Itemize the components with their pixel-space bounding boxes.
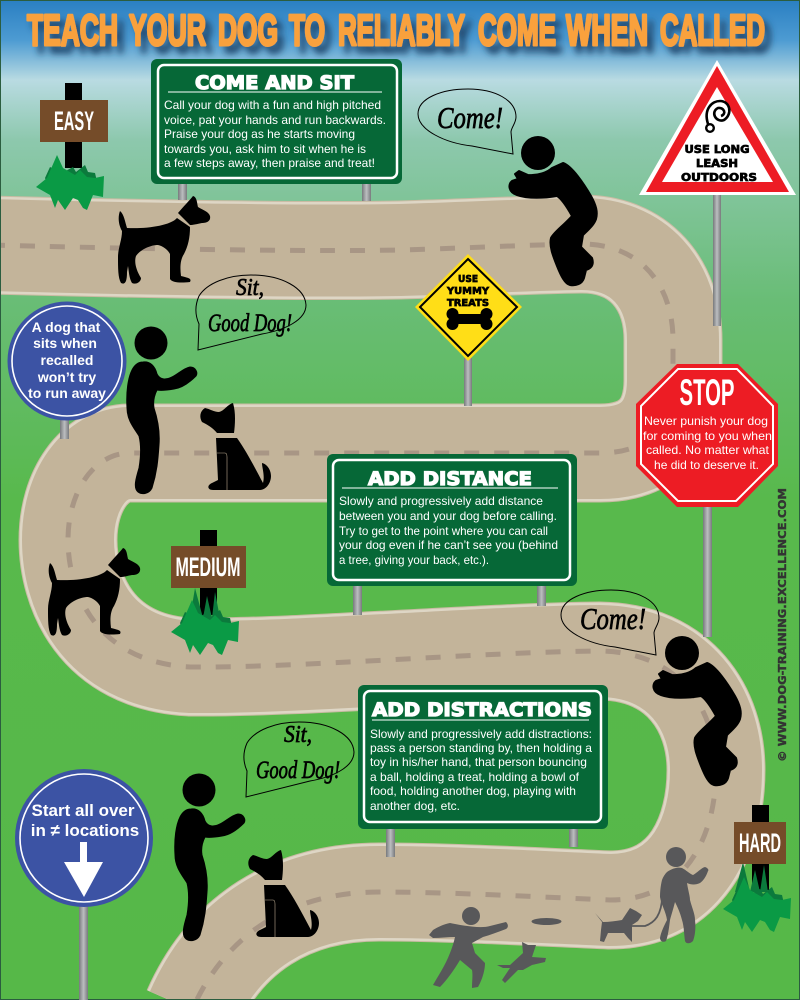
title: COME bbox=[478, 6, 556, 55]
person: standing lower bbox=[175, 774, 245, 941]
sign: stop: he did to deserve it. bbox=[654, 458, 759, 472]
panel: add distance: a tree, giving your back, etc.). bbox=[339, 553, 489, 567]
speech bubble: come lower bbox=[561, 590, 659, 655]
panel: add distractions: a ball, holding a treat, holding a bowl of bbox=[370, 770, 580, 784]
sign: easy: EASY bbox=[54, 106, 94, 136]
sign: use yummy treats: YUMMY bbox=[446, 286, 489, 297]
panel: come and sit: Call your dog with a fun and high pitched bbox=[164, 98, 381, 112]
panel: add distance: your dog even if he can’t see you (behind bbox=[339, 538, 558, 552]
sign: use yummy treats: TREATS bbox=[447, 298, 489, 309]
panel: add distance: Slowly and progressively add distance bbox=[339, 494, 543, 508]
sign: a dog that sits: recalled bbox=[41, 352, 93, 368]
panel: add distractions: ADD DISTRACTIONS bbox=[372, 699, 592, 721]
panel: come and sit: COME AND SIT bbox=[195, 72, 354, 94]
sign: use long leash outdoors: LEASH bbox=[696, 158, 738, 170]
title: TO bbox=[289, 6, 325, 55]
panel: come and sit: voice, pat your hands and run backwards. bbox=[164, 113, 386, 127]
panel: add distractions: pass a person standing by, then holding a bbox=[370, 741, 592, 755]
sign: a dog that sits: sits when bbox=[33, 335, 97, 351]
dog: jumping for frisbee bbox=[497, 942, 546, 983]
speech bubble: sit good dog lower bbox=[244, 722, 354, 797]
winding road bbox=[0, 244, 716, 1000]
sign: hard bbox=[723, 805, 791, 932]
title bbox=[27, 6, 765, 55]
sign: a dog that sits bbox=[8, 302, 126, 439]
title: DOG bbox=[218, 6, 278, 55]
sign: start all over: Start all over bbox=[32, 801, 135, 820]
sign: use long leash outdoors: USE LONG bbox=[684, 144, 750, 156]
dog: sitting lower bbox=[248, 850, 319, 937]
person: walking with dog on leash bbox=[595, 847, 708, 943]
title: WHEN bbox=[566, 6, 648, 55]
sign: medium: MEDIUM bbox=[176, 552, 240, 582]
website credit: © WWW.DOG-TRAINING.EXCELLENCE.COM bbox=[776, 488, 789, 762]
panel: add distractions: toy in his/her hand, that person bouncing bbox=[370, 755, 587, 769]
sign: stop: for coming to you when bbox=[643, 429, 772, 443]
sign: start all over bbox=[15, 769, 153, 1000]
speech bubble: come top bbox=[418, 89, 516, 154]
panel: come and sit: a few steps away, then praise and treat! bbox=[164, 156, 375, 170]
sign: a dog that sits: to run away bbox=[28, 385, 106, 401]
panel: come and sit bbox=[151, 59, 402, 201]
sign: stop: called. No matter what bbox=[646, 443, 770, 457]
panel: add distractions: food, holding another dog, playing with bbox=[370, 784, 576, 798]
sign: stop: STOP bbox=[680, 372, 734, 413]
title: YOUR bbox=[129, 6, 206, 55]
panel: add distance: between you and your dog before calling. bbox=[339, 509, 557, 523]
title: TEACH bbox=[27, 6, 118, 55]
dog: walking top bbox=[118, 196, 210, 284]
person: calling come lower bbox=[653, 636, 741, 785]
panel: add distance: ADD DISTANCE bbox=[368, 468, 532, 490]
person: calling come top bbox=[509, 136, 597, 285]
panel: add distractions: Slowly and progressively add distractions: bbox=[370, 727, 592, 741]
sign: use long leash outdoors bbox=[639, 60, 796, 326]
dog: walking middle bbox=[48, 548, 140, 636]
sign: a dog that sits: won’t try bbox=[37, 369, 96, 385]
sign: use yummy treats bbox=[415, 254, 522, 406]
sign: use long leash outdoors: OUTDOORS bbox=[681, 172, 757, 184]
dog: sitting top bbox=[200, 403, 271, 490]
panel: add distractions bbox=[358, 685, 608, 857]
sign: start all over: in ≠ locations bbox=[31, 821, 139, 840]
panel: come and sit: Praise your dog as he starts moving bbox=[164, 127, 355, 141]
title: RELIABLY bbox=[338, 6, 465, 55]
sign: use yummy treats: USE bbox=[458, 274, 478, 285]
sign: a dog that sits: A dog that bbox=[32, 319, 101, 335]
panel: come and sit: towards you, ask him to sit when he is bbox=[164, 142, 366, 156]
speech bubble: sit good dog top bbox=[196, 275, 306, 350]
panel: add distractions: another dog, etc. bbox=[370, 799, 460, 813]
sign: medium bbox=[171, 530, 246, 655]
sign: stop: Never punish your dog bbox=[644, 414, 768, 428]
sign: easy bbox=[36, 83, 108, 210]
person: throwing frisbee bbox=[429, 907, 562, 988]
sign: stop bbox=[636, 364, 778, 637]
panel: add distance bbox=[327, 454, 577, 615]
person: standing top bbox=[127, 326, 197, 494]
panel: add distance: Try to get to the point where you can call bbox=[339, 524, 548, 538]
